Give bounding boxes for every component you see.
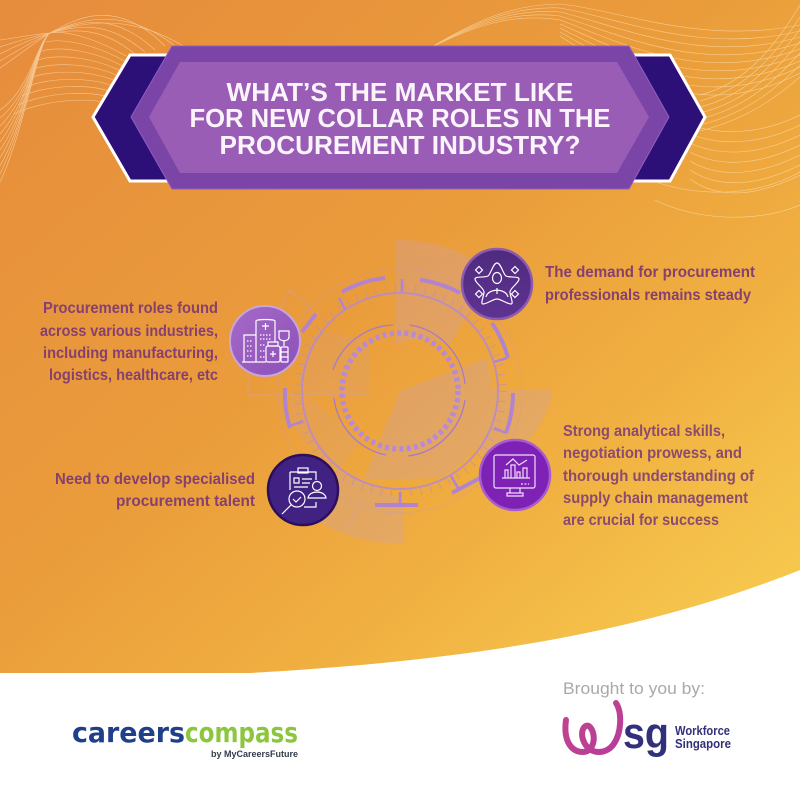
logo wordmark: Workforce Singapore bbox=[675, 723, 731, 751]
title banner bbox=[93, 46, 705, 189]
icon circle: analytics bbox=[480, 440, 550, 510]
text: analytics: are crucial for success bbox=[563, 512, 719, 529]
title: WHAT’S THE MARKET LIKE bbox=[226, 77, 574, 107]
title: FOR NEW COLLAR ROLES IN THE bbox=[190, 103, 610, 133]
text: industries: including manufacturing, bbox=[43, 345, 218, 362]
translucent sectors bbox=[290, 240, 551, 543]
white footer bbox=[0, 570, 800, 800]
radial marks bbox=[290, 279, 507, 505]
text: analytics: Strong analytical skills, bbox=[563, 423, 725, 440]
text: brought to you by: Brought to you by: bbox=[563, 679, 705, 698]
wave lines: top right bbox=[430, 4, 800, 217]
text: demand bbox=[545, 264, 755, 304]
text: analytics bbox=[563, 423, 755, 529]
icon circle: demand star bbox=[462, 249, 532, 319]
banner middle hexagon bbox=[131, 46, 669, 189]
central radial graphic bbox=[248, 240, 551, 543]
text: analytics: thorough understanding of bbox=[563, 468, 755, 485]
logo: careers compass: by MyCareersFuture bbox=[211, 749, 298, 759]
faint sector outlines bbox=[248, 290, 366, 525]
faint left sectors bbox=[290, 330, 370, 470]
logo mark: swirl bbox=[565, 703, 620, 752]
logo: careers compass bbox=[72, 716, 298, 759]
wave lines: top left bbox=[0, 15, 183, 182]
text: industries: across various industries, bbox=[40, 323, 218, 340]
text: analytics: supply chain management bbox=[563, 490, 748, 507]
title bbox=[190, 77, 610, 160]
text: talent: procurement talent bbox=[116, 493, 255, 510]
logo wordmark: Workforce Singapore: Workforce bbox=[675, 723, 730, 738]
text: talent: Need to develop specialised bbox=[55, 471, 255, 488]
logo wordmark: sg: sg bbox=[623, 709, 669, 758]
text: demand: The demand for procurement bbox=[545, 264, 755, 281]
thin inner arcs bbox=[333, 325, 465, 456]
text: demand: professionals remains steady bbox=[545, 287, 751, 304]
text: analytics: negotiation prowess, and bbox=[563, 445, 742, 462]
outer thick arcs bbox=[285, 278, 513, 505]
logo wordmark: Workforce Singapore: Singapore bbox=[675, 736, 731, 751]
title: PROCUREMENT INDUSTRY? bbox=[220, 130, 580, 160]
text: talent bbox=[55, 471, 255, 510]
logo: careers compass: compass bbox=[185, 716, 298, 749]
banner back hexagon bbox=[93, 55, 705, 181]
text: industries: logistics, healthcare, etc bbox=[49, 367, 218, 384]
icon circle: talent bbox=[268, 455, 338, 525]
text: industries: Procurement roles found bbox=[43, 300, 218, 317]
logo: careers compass: careers bbox=[72, 716, 185, 749]
dotted ring bbox=[342, 333, 458, 449]
outer tick ring bbox=[302, 293, 498, 489]
logo: workforce singapore bbox=[565, 703, 731, 758]
text: industries bbox=[40, 300, 218, 384]
banner inner hexagon bbox=[149, 62, 649, 173]
icon circle: industries bbox=[230, 306, 300, 376]
